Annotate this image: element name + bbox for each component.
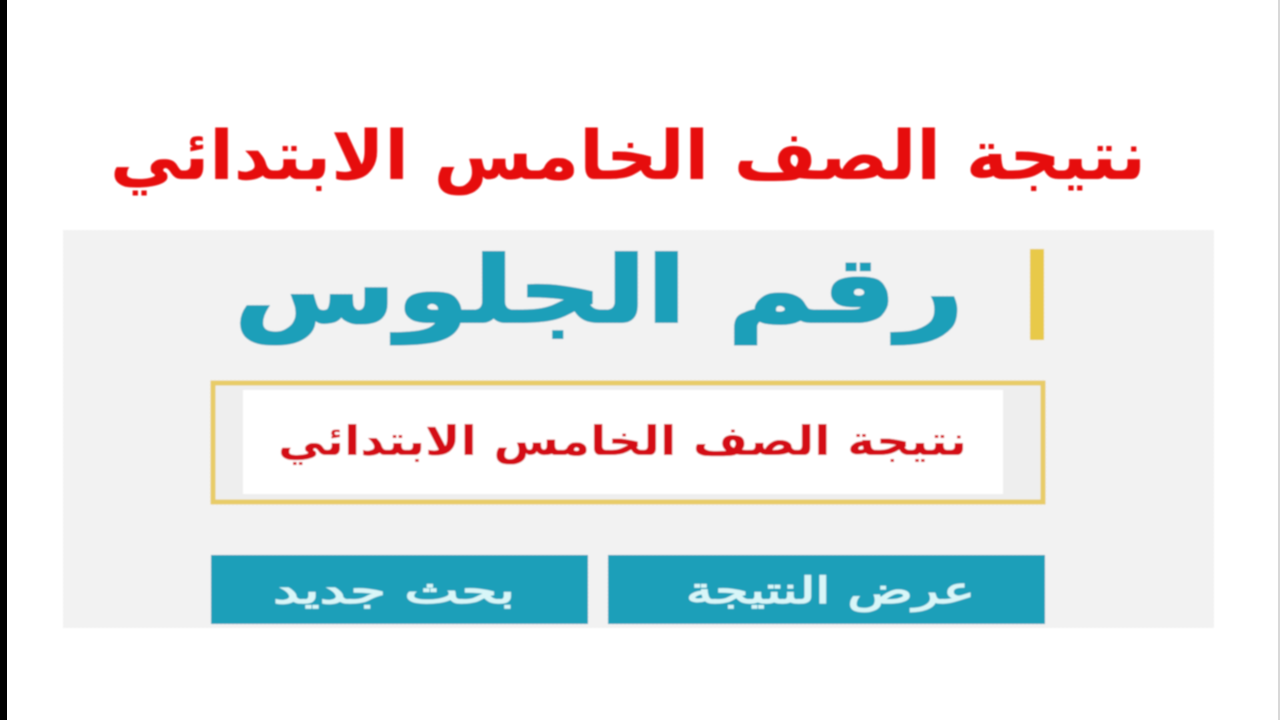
button: show result [608, 555, 1045, 624]
button: new search [211, 555, 588, 624]
accent bar [1030, 249, 1044, 340]
title: نتيجة الصف الخامس الابتدائي [110, 117, 1146, 196]
heading: seat number: رقم الجلوس [234, 237, 964, 345]
button: show result: عرض النتيجة [686, 571, 975, 612]
input box [213, 383, 1043, 502]
input text: نتيجة الصف الخامس الابتدائي [278, 417, 967, 465]
button: new search: بحث جديد [273, 571, 515, 612]
right grey edge line [1278, 0, 1280, 720]
left black edge bar [0, 0, 7, 720]
panel: seat number form [63, 230, 1214, 628]
